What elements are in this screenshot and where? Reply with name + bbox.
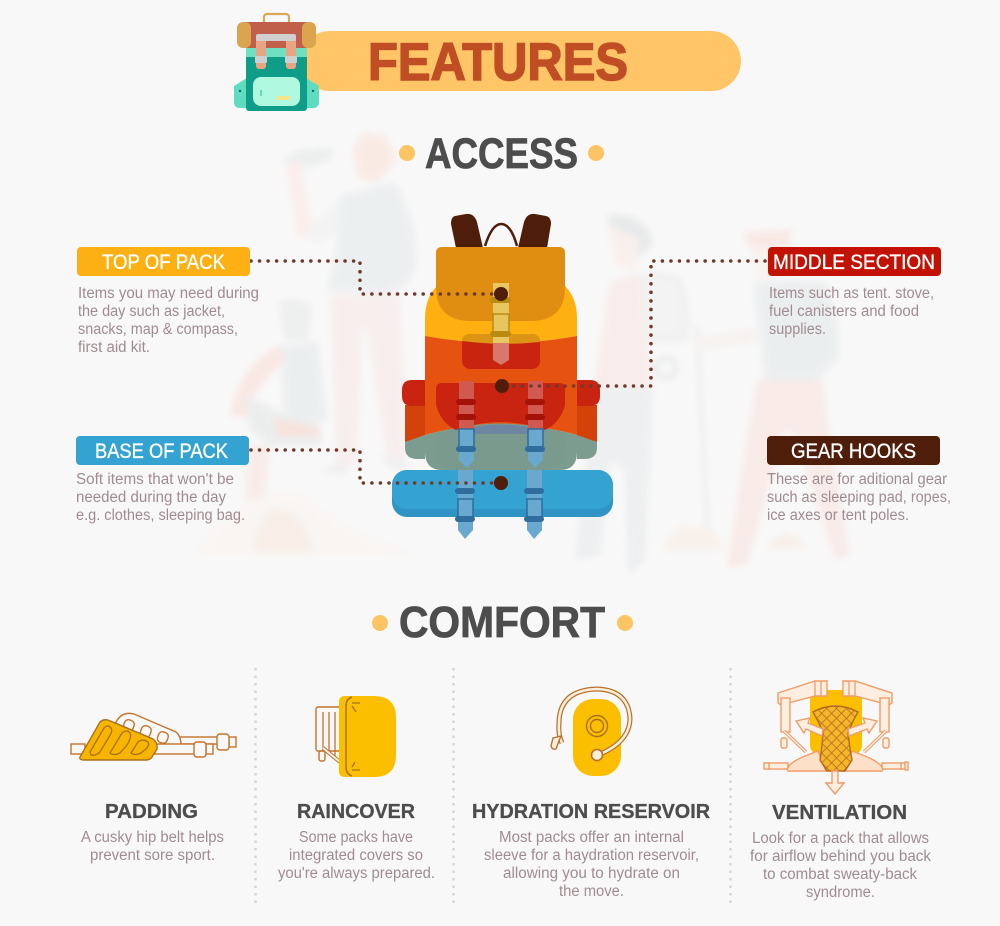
panel: ventilation: Look for a pack that allows: [752, 830, 929, 847]
title: FEATURES: [368, 33, 628, 92]
callout: top of pack: the day such as jacket,: [78, 303, 225, 320]
heading: comfort: COMFORT: [399, 598, 605, 647]
panel: padding: prevent sore sport.: [90, 847, 215, 864]
callout: middle section: supplies.: [769, 321, 826, 338]
panel: raincover: you're always prepared.: [278, 865, 435, 882]
lower pocket: [436, 383, 565, 434]
pack body: [425, 283, 577, 470]
callout: base of pack: e.g. clothes, sleeping bag.: [76, 507, 245, 524]
hiker drinking: [282, 133, 417, 475]
seated hiker: [193, 299, 420, 555]
callout: middle section: [768, 247, 941, 338]
panel: raincover: [278, 696, 435, 882]
right compression strap: [525, 381, 545, 468]
callout: base of pack: [76, 436, 249, 524]
hiker with pole: [727, 230, 850, 568]
panel: padding: A cusky hip belt helps: [81, 829, 224, 846]
hiker with pack: [575, 214, 687, 575]
right bedroll strap: [524, 470, 544, 539]
callout: middle section: MIDDLE SECTION: [773, 251, 935, 274]
header: features banner: [300, 31, 741, 92]
background: blurred hikers illustration: [193, 133, 850, 575]
panel: raincover: Some packs have: [299, 829, 413, 846]
callout: top of pack: Items you may need during: [78, 285, 259, 302]
panel: padding: [71, 713, 236, 864]
callout: top of pack: first aid kit.: [78, 339, 150, 356]
icon: raincover: [316, 696, 396, 777]
connector: middle section: [495, 261, 765, 393]
callout: middle section: Items such as tent. stove,: [769, 285, 934, 302]
icon: ventilation back panel: [764, 681, 908, 794]
connector: top of pack: [251, 261, 508, 301]
panel: ventilation: VENTILATION: [772, 802, 907, 824]
callout: gear hooks: ice axes or tent poles.: [767, 507, 909, 524]
trekking pole and arm: [663, 325, 807, 550]
heading: access: ACCESS: [425, 130, 578, 178]
panel: hydration reservoir: [472, 689, 711, 900]
callout: base of pack: needed during the day: [76, 489, 226, 506]
left compression strap: [456, 381, 476, 468]
side pockets: [402, 380, 600, 459]
icon: hip belt: [71, 713, 236, 760]
banner pill: [300, 31, 741, 91]
callout: top of pack: snacks, map & compass,: [78, 321, 238, 338]
panel: hydration reservoir: Most packs offer an internal: [499, 829, 684, 846]
callout: top of pack: TOP OF PACK: [102, 251, 225, 274]
callout: gear hooks: These are for aditional gear: [767, 471, 947, 488]
panel: hydration reservoir: allowing you to hydrate on: [503, 865, 680, 882]
lid flap: [436, 247, 565, 321]
panel: hydration reservoir: the move.: [559, 883, 624, 900]
callout: middle section: fuel canisters and food: [769, 303, 919, 320]
callout: top of pack: [77, 247, 259, 356]
panel: ventilation: syndrome.: [806, 884, 875, 901]
callout: gear hooks: GEAR HOOKS: [791, 440, 916, 463]
panel: raincover: integrated covers so: [289, 847, 423, 864]
callout: base of pack: Soft items that won't be: [76, 471, 234, 488]
main backpack illustration: [392, 214, 613, 539]
top pocket: [462, 334, 540, 369]
panel: raincover: RAINCOVER: [297, 801, 416, 823]
panel: ventilation: to combat sweaty-back: [763, 866, 917, 883]
panel: ventilation: for airflow behind you back: [750, 848, 931, 865]
panel: hydration reservoir: sleeve for a haydration reservoir,: [484, 847, 699, 864]
top strap and buckle: [490, 283, 511, 365]
icon: teal backpack: [234, 14, 319, 111]
connector: base of pack: [251, 450, 508, 490]
callout: gear hooks: [767, 436, 951, 524]
panel: hydration reservoir: HYDRATION RESERVOIR: [472, 801, 711, 823]
callout: gear hooks: such as sleeping pad, ropes,: [767, 489, 951, 506]
bedroll: [392, 470, 613, 517]
left bedroll strap: [455, 470, 475, 539]
panel: ventilation: [750, 681, 931, 901]
panel: padding: PADDING: [105, 801, 198, 823]
icon: hydration reservoir: [551, 689, 630, 776]
shoulder straps and handle: [451, 214, 551, 248]
callout: base of pack: BASE OF PACK: [95, 440, 228, 463]
